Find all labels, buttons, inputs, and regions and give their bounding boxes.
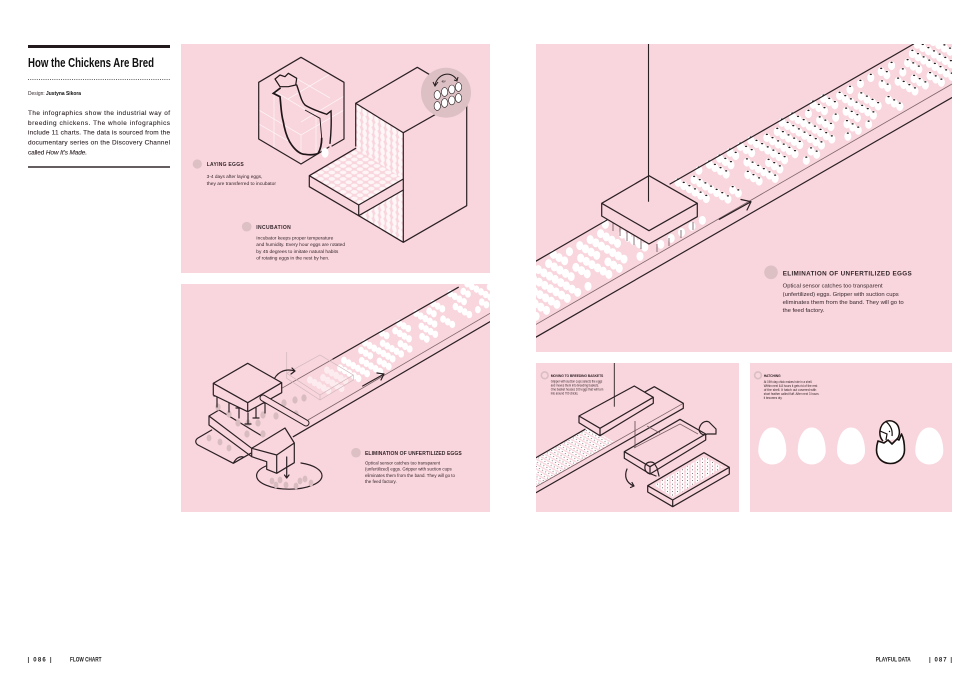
step 1 text: 3-4 days after laying eggs, <box>207 174 262 179</box>
sidebar bottom rule <box>28 166 170 168</box>
footer left: page number and section: | 086 | <box>28 658 52 664</box>
step 3 text: eliminates them from the band. They will go to <box>365 473 455 478</box>
conveyor band with eggs <box>282 284 490 438</box>
icon: chicken in isometric cube <box>259 57 344 164</box>
footer left: page number and section: FLOW CHART <box>70 658 102 664</box>
discard pool with eggs <box>257 463 322 489</box>
step 2 text: Incubator keeps proper temperature <box>256 236 334 241</box>
design credit: Design: Justyna Sikora <box>28 91 82 97</box>
step 3 text: (unfertilized) eggs. Gripper with suction cups <box>365 467 452 472</box>
left conveyor with chute <box>196 430 251 463</box>
filled basket with eggs <box>648 453 729 507</box>
step 6 text: Within next 6-8 hours it gets rid of the rest <box>764 384 817 388</box>
step 5 text: One basket houses 100 eggs that will turn <box>551 388 603 392</box>
panel: moving to breeding baskets <box>536 363 739 512</box>
roller <box>263 398 306 423</box>
step 1 text <box>193 159 277 186</box>
step 6 text: short feather called fluff. After next 3 hours <box>764 392 819 396</box>
step 5 text: Gripper with suction cups selects the eggs <box>551 380 603 384</box>
footer left: page number and section <box>28 658 102 664</box>
step 6 text: HATCHING <box>764 374 781 378</box>
sidebar: article intro <box>28 45 170 168</box>
step 4 text: the feed factory. <box>783 308 825 314</box>
intro text: include 11 charts. The data is sourced from the <box>28 130 170 137</box>
icon: hands holding basket <box>645 421 716 476</box>
footer right: section and page number: PLAYFUL DATA <box>876 658 911 664</box>
step 3 text: Optical sensor catches too transparent <box>365 460 441 465</box>
gripper block with cable <box>602 44 697 244</box>
curved arrow to filled basket <box>626 469 634 488</box>
empty basket <box>624 419 706 474</box>
arrow down into pool <box>284 457 289 478</box>
icon: rotating eggs 45 degrees <box>421 68 471 118</box>
step 2 text <box>242 222 346 261</box>
step 2 text: of rotating eggs in the nest by hen. <box>256 256 329 261</box>
step 3 text: ELIMINATION OF UNFERTILIZED EGGS <box>365 451 462 457</box>
step 4 text: ELIMINATION OF UNFERTILIZED EGGS <box>783 270 912 278</box>
step 2 text: by 45 degrees to imitate natural habits <box>256 249 339 254</box>
step 5 text: into around 700 chicks. <box>551 392 578 396</box>
panel: hatching <box>750 363 952 512</box>
intro text <box>28 110 170 156</box>
incubator box <box>309 67 467 242</box>
step 4 text: eliminates them from the band. They will go to <box>783 300 904 306</box>
step 6 text <box>755 372 819 400</box>
step 3 text <box>351 448 462 484</box>
conveyor band with eggs <box>536 386 684 494</box>
band direction arrow <box>719 200 751 219</box>
gripper plate <box>579 363 653 436</box>
title: How the Chickens Are Bred <box>28 56 154 70</box>
step 4 text <box>764 266 912 314</box>
step 5 text <box>541 372 604 396</box>
step 4 text: Optical sensor catches too transparent <box>783 284 883 290</box>
intro text: documentary series on the Discovery Channel <box>28 140 170 147</box>
ghost gripper position <box>287 352 353 400</box>
panel: elimination of unfertilized eggs, side view <box>181 284 490 512</box>
band direction arrow <box>363 373 384 386</box>
sidebar top rule <box>28 45 170 48</box>
panel: elimination of unfertilized eggs, close-up <box>536 44 952 352</box>
arrow down into basket <box>634 421 636 448</box>
conveyor band with eggs and suction dots <box>536 44 952 338</box>
step 6 text: of the shell. It hatch out covered with <box>764 388 816 392</box>
intro text: breeding chickens. The whole infographics <box>28 120 170 127</box>
step 4 text: (unfertilized) eggs. Gripper with suction cups <box>783 292 899 298</box>
white eggs row <box>758 428 943 464</box>
step 5 text: MOVING TO BREEDING BASKETS <box>551 374 604 378</box>
step 6 text: At 19th day chick makes hole in a shell. <box>764 380 812 384</box>
step 1 text: LAYING EGGS <box>207 162 244 168</box>
step 3 text: the feed factory. <box>365 479 397 484</box>
step 2 text: INCUBATION <box>256 225 291 231</box>
eliminated eggs falling <box>215 394 307 438</box>
step 6 text: it becomes dry. <box>764 396 782 400</box>
curved motion arrow <box>274 367 296 378</box>
icon: rotating eggs 45 degrees: 45° <box>442 80 447 84</box>
suction cups <box>613 222 693 252</box>
hopper <box>209 410 294 473</box>
step 2 text: and humidity. Every hour eggs are rotated <box>256 242 346 247</box>
step 1 text: they are transferred to incubator <box>207 181 277 186</box>
footer right: section and page number: | 087 | <box>929 658 952 664</box>
suction gripper <box>213 363 282 424</box>
footer right: section and page number <box>876 658 952 664</box>
panel: laying eggs and incubation <box>181 44 490 273</box>
intro text: The infographics show the industrial way of <box>28 110 170 117</box>
egg tray <box>309 148 403 216</box>
step 5 text: and moves them into breeding baskets. <box>551 384 599 388</box>
icon: hatching chick <box>876 421 904 464</box>
intro text: called How It's Made. <box>28 150 87 156</box>
